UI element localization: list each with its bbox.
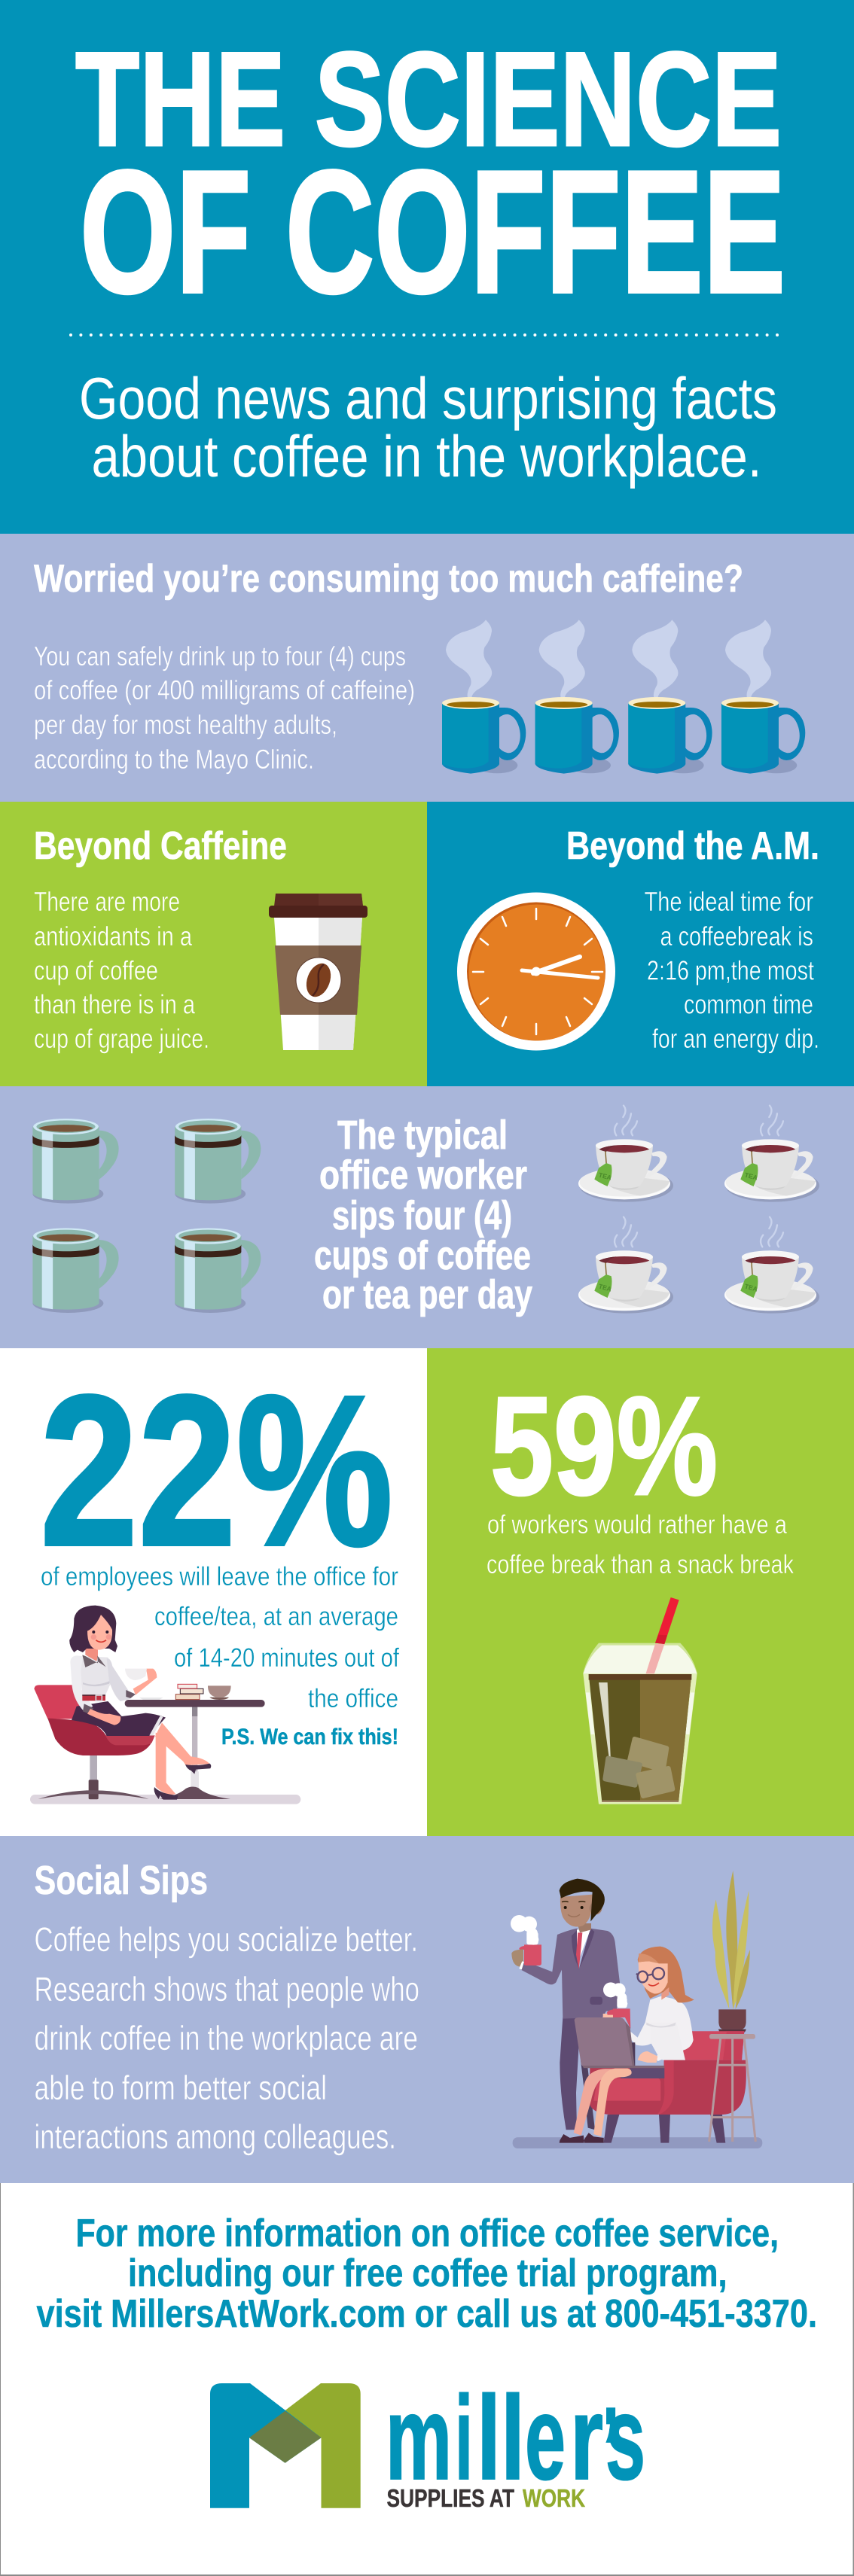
body text: socialize better: Research shows that people who	[35, 1970, 419, 2008]
body text: ideal break time: The ideal time for	[645, 886, 813, 917]
logo wordmark: s	[605, 2372, 645, 2504]
panel: header	[0, 0, 854, 534]
logo wordmark: ll	[477, 2372, 525, 2504]
body text: employees leaving: coffee/tea, at an average	[154, 1602, 398, 1631]
body text: safe amount: according to the Mayo Clinic.	[34, 744, 314, 775]
heading: beyond caffeine: Beyond Caffeine	[34, 824, 287, 868]
body text: antioxidants: cup of grape juice.	[34, 1023, 209, 1054]
logo wordmark: ’	[602, 2383, 619, 2516]
body text: employees leaving: of 14-20 minutes out of	[174, 1643, 399, 1673]
illustration: two colleagues with coffee	[511, 1871, 762, 2148]
body text: socialize better: interactions among colleagues.	[35, 2118, 396, 2156]
body text: employees leaving: of employees will leave the office for	[41, 1562, 398, 1591]
body text: safe amount: per day for most healthy adults,	[34, 709, 337, 740]
body text: safe amount	[34, 641, 415, 775]
body text: antioxidants	[34, 886, 209, 1054]
text: typical office worker: or tea per day	[322, 1272, 532, 1317]
subtitle	[79, 365, 777, 489]
text: typical office worker: office worker	[319, 1153, 527, 1198]
panel: beyond caffeine	[0, 802, 427, 1086]
icon: four steaming blue mugs	[442, 620, 805, 774]
text: typical office worker	[314, 1113, 532, 1317]
icons: travel mugs	[32, 1119, 261, 1313]
logo wordmark: m	[386, 2372, 452, 2504]
icons: tea cups	[578, 1106, 819, 1314]
title	[75, 24, 785, 329]
body text: employees leaving: the office	[308, 1684, 398, 1713]
body text: socialize better: drink coffee in the workplace are	[35, 2019, 418, 2057]
text: typical office worker: cups of coffee	[314, 1233, 531, 1278]
icon: clock	[457, 893, 615, 1051]
text: typical office worker: sips four (4)	[332, 1193, 512, 1238]
logo wordmark: r	[570, 2372, 603, 2504]
body text: ideal break time	[645, 886, 819, 1054]
panel: footer	[0, 2183, 854, 2576]
body text: ideal break time: 2:16 pm,the most	[647, 955, 814, 986]
panel: 59 percent	[427, 1348, 854, 1836]
heading: social sips: Social Sips	[35, 1858, 208, 1903]
body text: socialize better: able to form better social	[35, 2069, 327, 2107]
logo wordmark: e	[525, 2372, 566, 2504]
body text: ideal break time: a coffeebreak is	[660, 921, 813, 952]
body text: ideal break time: common time	[684, 989, 813, 1019]
body text: antioxidants: There are more	[34, 886, 180, 917]
illustration: woman at cafe table	[30, 1606, 300, 1804]
panel: 22 percent	[0, 1348, 427, 1836]
body text: antioxidants: cup of coffee	[34, 955, 158, 986]
icon: iced coffee	[583, 1597, 697, 1804]
body text: workers prefer coffee break: of workers would rather have a	[487, 1510, 787, 1539]
call to action	[36, 2212, 817, 2336]
body text: antioxidants: antioxidants in a	[34, 921, 193, 952]
text: typical office worker: The typical	[337, 1113, 508, 1158]
logo tagline: SUPPLIES AT	[387, 2484, 514, 2512]
call to action: including our free coffee trial program,	[128, 2252, 727, 2295]
body text: workers prefer coffee break: coffee break than a snack break	[486, 1550, 794, 1579]
logo mark	[210, 2383, 361, 2508]
logo tagline: WORK	[523, 2484, 585, 2512]
panel: cups per day	[0, 1086, 854, 1348]
body text: antioxidants: than there is in a	[34, 989, 196, 1019]
panel: caffeine limit	[0, 534, 854, 802]
body text: workers prefer coffee break	[486, 1510, 794, 1579]
panel: beyond the AM	[427, 802, 854, 1086]
logo	[210, 2372, 645, 2516]
body text: socialize better: Coffee helps you socialize better.	[35, 1920, 418, 1959]
icon: takeaway coffee cup	[269, 894, 368, 1050]
callout: we can fix this: P.S. We can fix this!	[221, 1725, 398, 1749]
body text: safe amount: of coffee (or 400 milligrams of caffeine)	[34, 674, 415, 705]
body text: safe amount: You can safely drink up to four (4) cups	[34, 641, 406, 671]
body text: employees leaving	[41, 1562, 399, 1713]
body text: socialize better	[35, 1920, 419, 2156]
subtitle: about coffee in the workplace.	[92, 423, 762, 489]
panel: social sips	[0, 1836, 854, 2183]
logo wordmark: i	[455, 2372, 473, 2504]
